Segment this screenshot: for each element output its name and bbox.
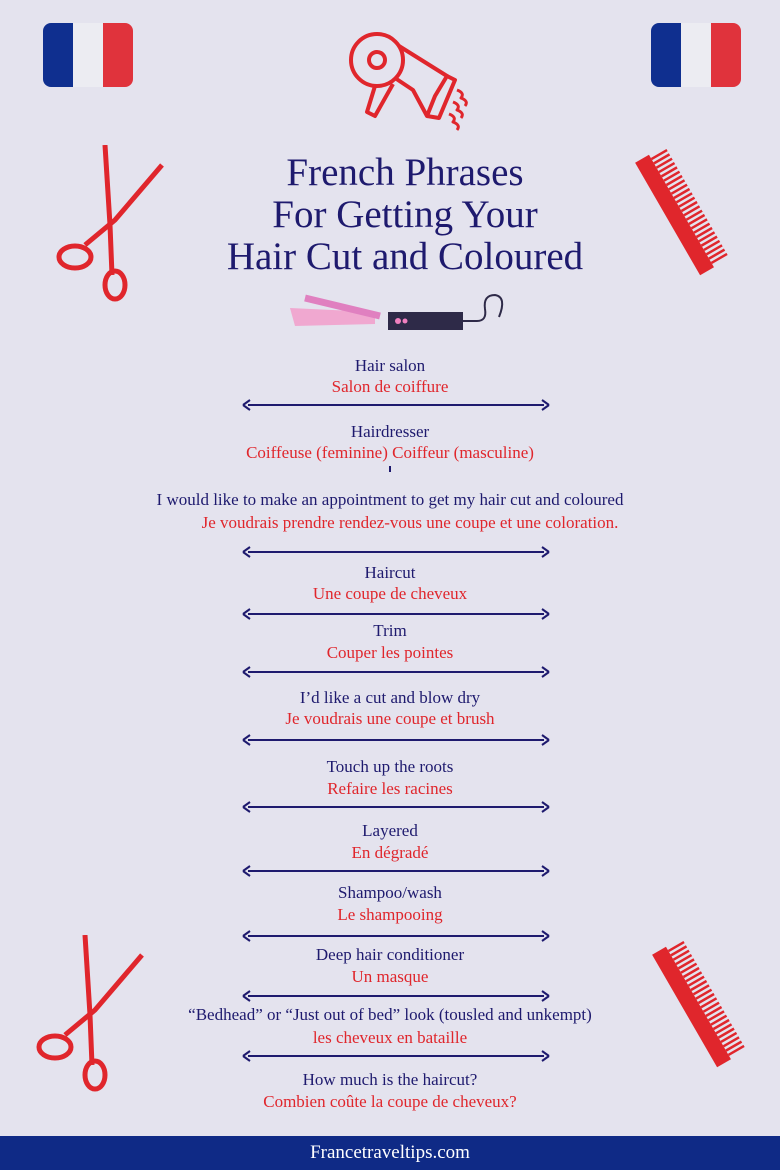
phrase list: Salon de coiffure [332,377,448,396]
phrase list: Haircut [364,563,415,582]
title: For Getting Your [272,193,538,236]
title [227,151,583,278]
icon: hair dryer [349,32,468,131]
phrase list: Touch up the roots [327,757,453,776]
phrase list: I’d like a cut and blow dry [300,688,480,707]
icon: comb top [635,149,728,276]
phrase list: Shampoo/wash [338,883,442,902]
phrase list: Je voudrais prendre rendez-vous une coupe et une coloration. [202,513,618,532]
phrase list: I would like to make an appointment to get my hair cut and coloured [157,490,623,509]
icon: scissors top [56,145,164,302]
title: Hair Cut and Coloured [227,235,583,278]
footer [0,1136,780,1170]
phrase list: Je voudrais une coupe et brush [285,709,495,728]
phrase list: Couper les pointes [327,643,453,662]
icon: curling iron [290,294,504,330]
phrase list: Deep hair conditioner [316,945,464,964]
phrase list: “Bedhead” or “Just out of bed” look (tousled and unkempt) [188,1005,592,1024]
phrase list: Layered [362,821,418,840]
icon: comb bottom [652,941,745,1068]
phrase list: Un masque [352,967,428,986]
phrase list: Hair salon [355,356,425,375]
phrase list: Une coupe de cheveux [313,584,467,603]
phrase list: Combien coûte la coupe de cheveux? [263,1092,517,1111]
phrase list: Trim [373,621,407,640]
phrase list: How much is the haircut? [303,1070,477,1089]
icon: scissors bottom [36,935,144,1092]
phrase list: Refaire les racines [327,779,453,798]
phrase list: Hairdresser [351,422,429,441]
icon: flag left [43,23,133,87]
phrase list: Coiffeuse (feminine) Coiffeur (masculine) [246,443,534,462]
phrase list: les cheveux en bataille [313,1028,467,1047]
title: French Phrases [286,151,524,194]
phrase list: Le shampooing [337,905,443,924]
phrase list: En dégradé [352,843,428,862]
icon: flag right [651,23,741,87]
footer: Francetraveltips.com [310,1142,470,1163]
